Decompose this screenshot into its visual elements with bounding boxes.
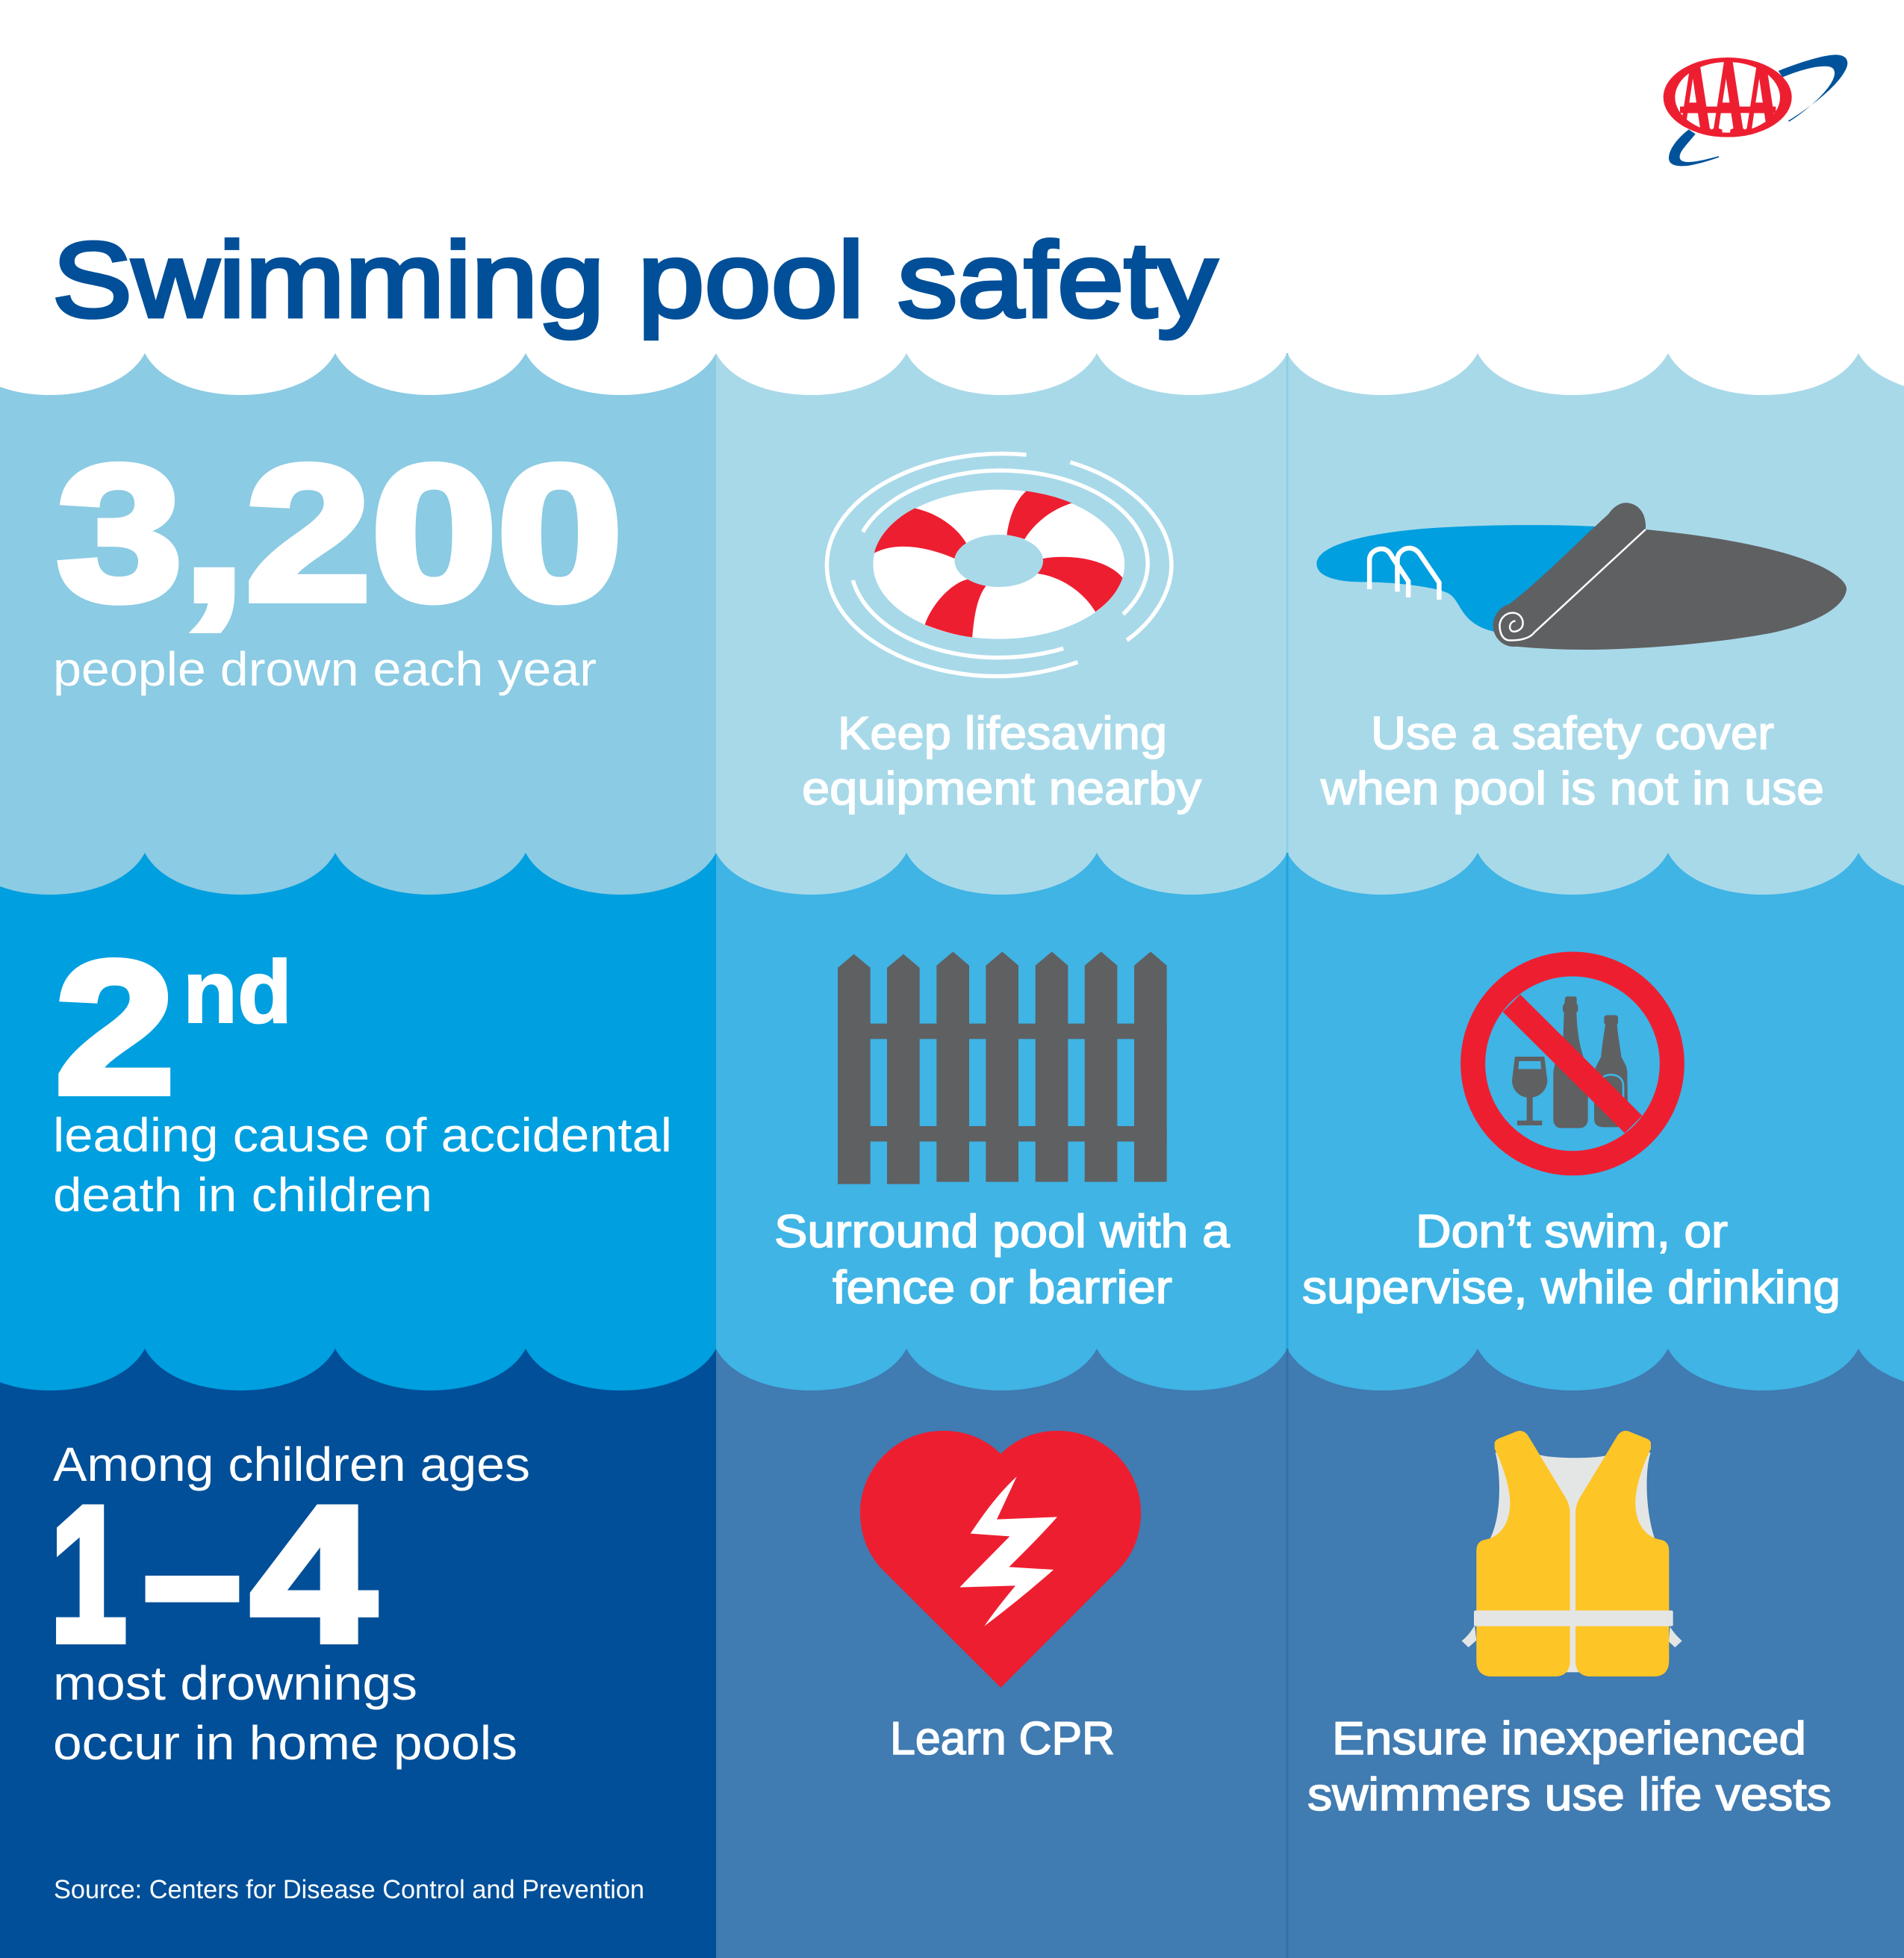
stat: 2nd leading cause: leading cause of accidental	[53, 1108, 672, 1162]
panel: row 3 statistic background	[0, 1349, 716, 1958]
stat: 2nd leading cause	[53, 923, 672, 1222]
panel: no drinking background	[1287, 853, 1904, 1396]
caption: keep lifesaving equipment: equipment nearby	[802, 763, 1201, 815]
caption: use a safety cover	[1320, 708, 1824, 815]
caption: don't swim while drinking	[1302, 1206, 1841, 1314]
stat: ages 1–4 home pools	[50, 1438, 530, 1770]
caption: ensure life vests: swimmers use life vests	[1307, 1769, 1832, 1821]
icon: pool with safety cover	[1316, 503, 1847, 650]
stat: 2nd leading cause: 2	[55, 923, 175, 1133]
panel: safety cover background	[1287, 353, 1904, 896]
panel: CPR background	[716, 1349, 1287, 1958]
panel: row 1 statistic background	[0, 353, 716, 896]
stat: 2nd leading cause: nd	[183, 942, 292, 1042]
panel: row 2 statistic background	[0, 853, 716, 1396]
caption: use a safety cover: Use a safety cover	[1371, 708, 1774, 759]
caption: surround pool with fence: fence or barrier	[833, 1262, 1172, 1314]
panel: lifesaving equipment background	[716, 353, 1287, 896]
panel: life vests background	[1287, 1349, 1904, 1958]
stat: ages 1–4 home pools: Among children ages	[53, 1438, 530, 1491]
caption: use a safety cover: when pool is not in use	[1320, 763, 1824, 815]
caption: keep lifesaving equipment	[802, 708, 1201, 815]
icon: heart with lightning bolt	[860, 1431, 1141, 1688]
caption: surround pool with fence	[774, 1206, 1231, 1314]
caption: don't swim while drinking: Don’t swim, or	[1416, 1206, 1728, 1258]
icon: fence	[838, 951, 1167, 1184]
caption: don't swim while drinking: supervise, while drinking	[1302, 1262, 1841, 1314]
caption: keep lifesaving equipment: Keep lifesaving	[838, 708, 1167, 759]
caption: surround pool with fence: Surround pool with a	[774, 1206, 1231, 1258]
stat: ages 1–4 home pools: 4	[251, 1466, 377, 1682]
stat: 2nd leading cause: death in children	[53, 1168, 432, 1222]
caption: ensure life vests: Ensure inexperienced	[1332, 1713, 1806, 1765]
stat: ages 1–4 home pools: –	[143, 1466, 241, 1682]
icon: AAA logo	[1664, 55, 1847, 166]
stat: 3,200 people drown each year: 3,200	[57, 425, 623, 641]
icon: no drinking sign	[1473, 964, 1672, 1163]
caption: learn CPR: Learn CPR	[890, 1713, 1115, 1765]
stat: ages 1–4 home pools: 1	[50, 1466, 127, 1682]
stat: 3,200 people drown each year	[53, 425, 623, 696]
icon: life ring with ripples	[827, 454, 1172, 677]
title: Swimming pool safety	[52, 221, 1218, 340]
stat: ages 1–4 home pools: occur in home pools	[53, 1716, 517, 1770]
caption: ensure life vests	[1307, 1713, 1832, 1821]
stat: 3,200 people drown each year: people drown each year	[53, 642, 597, 696]
source note: Source: Centers for Disease Control and Prevention	[54, 1875, 644, 1904]
icon: life vest	[1462, 1431, 1682, 1676]
panel: fence background	[716, 853, 1287, 1396]
stat: ages 1–4 home pools: most drownings	[53, 1656, 417, 1710]
